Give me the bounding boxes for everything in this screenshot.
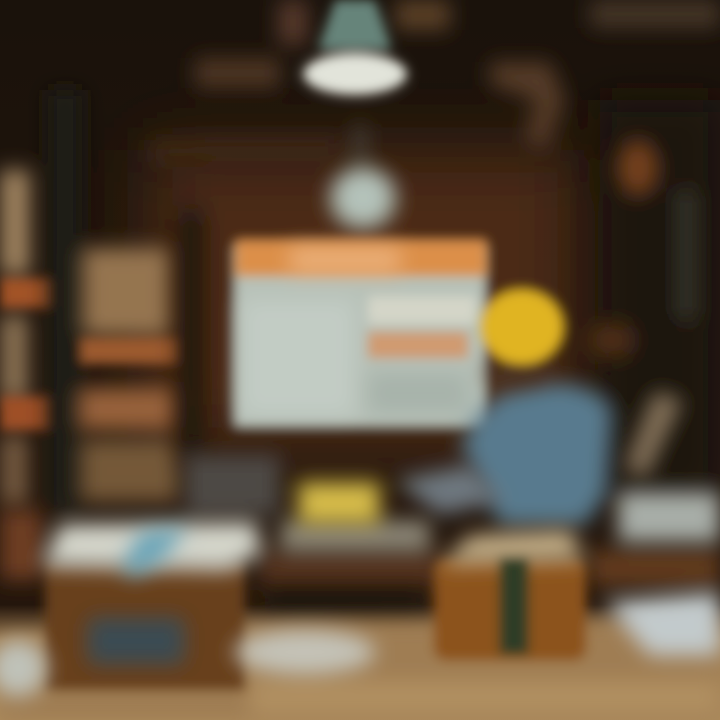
loose papers on table bbox=[0, 592, 720, 696]
worker arm bbox=[395, 465, 505, 515]
workbench with papers bbox=[185, 455, 720, 614]
yellow hard hat bbox=[480, 289, 564, 365]
left shelving with boxes bbox=[0, 90, 204, 580]
worker in yellow hard hat bbox=[395, 289, 612, 525]
upper hanging lamp bbox=[303, 0, 407, 95]
ceiling beams and hanging details bbox=[150, 0, 720, 358]
worker shirt bbox=[462, 384, 612, 525]
worker face bbox=[486, 356, 550, 388]
broom and background objects at right bbox=[625, 392, 682, 478]
right cardboard box bbox=[434, 530, 586, 660]
lower hanging lamp bbox=[331, 125, 395, 228]
notice board with orange header bbox=[234, 240, 486, 427]
table surface at bottom bbox=[0, 618, 720, 720]
left cardboard box bbox=[42, 522, 262, 690]
background: dark warehouse wall bbox=[150, 100, 720, 500]
